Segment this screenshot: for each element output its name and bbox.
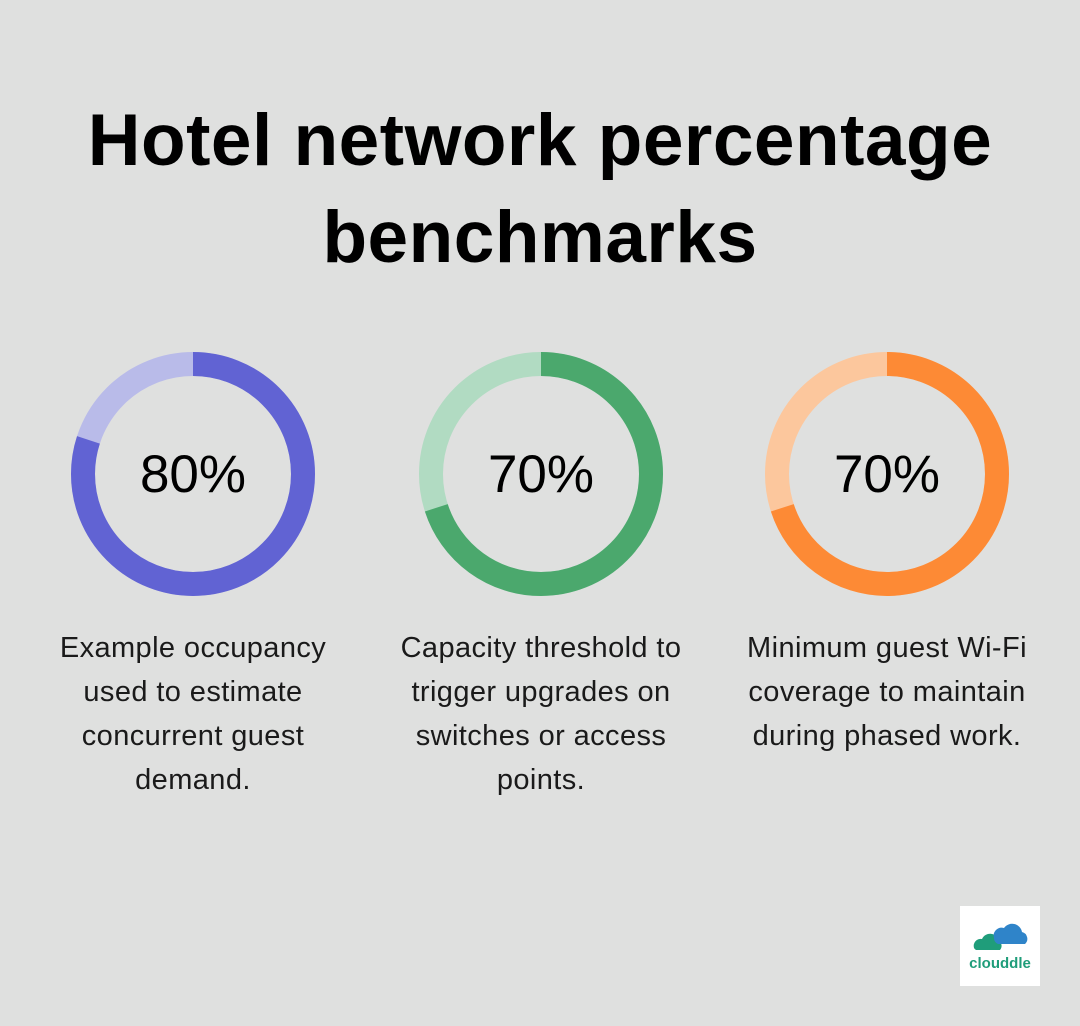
donut: 70% coverage: 70% bbox=[834, 445, 940, 504]
caption 1: demand. bbox=[135, 764, 251, 796]
donut: 70% coverage bbox=[765, 352, 1009, 596]
donut: 80% bbox=[71, 352, 315, 596]
caption 2 bbox=[401, 632, 681, 796]
caption 2: Capacity threshold to bbox=[401, 632, 681, 664]
caption 2: switches or access bbox=[416, 720, 666, 752]
caption 2: points. bbox=[497, 764, 585, 796]
donut: 70% capacity bbox=[419, 352, 663, 596]
logo bbox=[960, 906, 1040, 986]
donut: 80%: 80% bbox=[140, 445, 246, 504]
caption 1: Example occupancy bbox=[60, 632, 326, 664]
logo: clouddle bbox=[969, 955, 1031, 972]
caption 1: used to estimate bbox=[83, 676, 303, 708]
title bbox=[88, 100, 992, 278]
caption 3: Minimum guest Wi-Fi bbox=[747, 632, 1027, 664]
title: Hotel network percentage bbox=[88, 100, 992, 181]
donut: 70% capacity: 70% bbox=[488, 445, 594, 504]
caption 3 bbox=[747, 632, 1027, 752]
caption 1 bbox=[60, 632, 326, 796]
caption 3: coverage to maintain bbox=[748, 676, 1026, 708]
caption 1: concurrent guest bbox=[82, 720, 304, 752]
caption 2: trigger upgrades on bbox=[411, 676, 671, 708]
caption 3: during phased work. bbox=[753, 720, 1021, 752]
title: benchmarks bbox=[322, 197, 758, 278]
